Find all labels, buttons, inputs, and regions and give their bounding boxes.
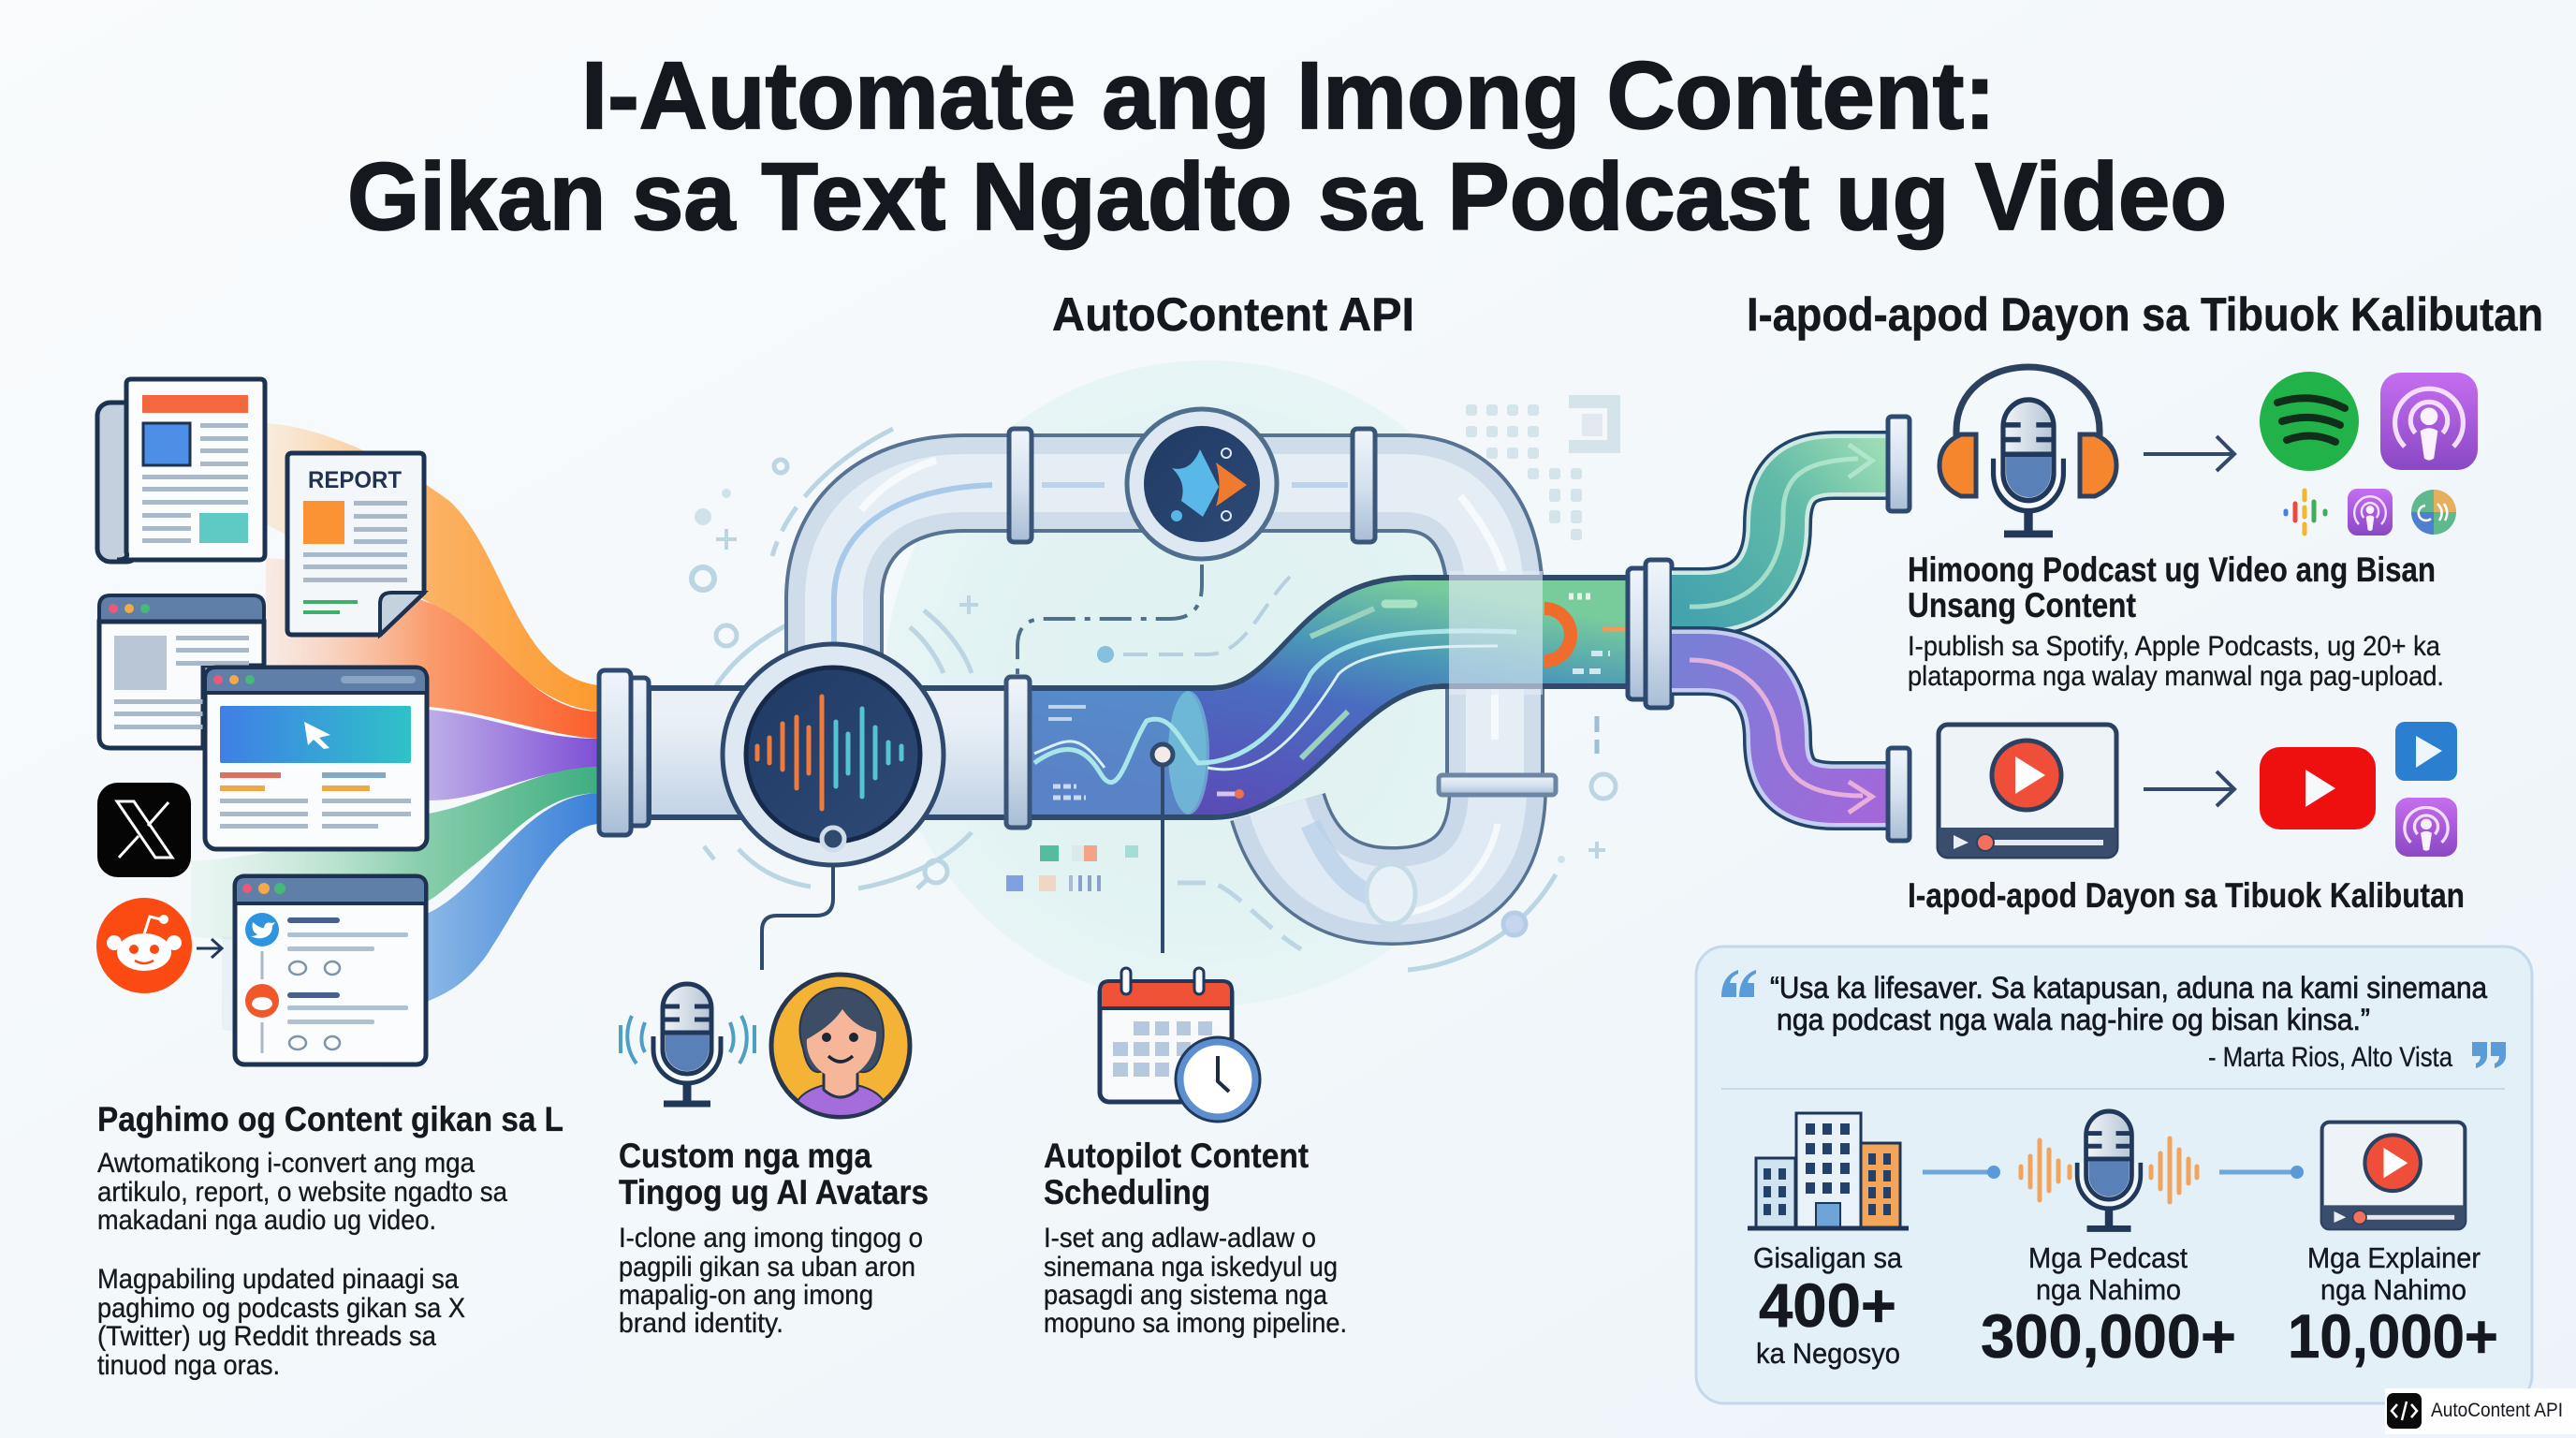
text block: autopilot: Scheduling <box>1044 1173 1210 1211</box>
stat: podcasts: nga Nahimo <box>2036 1273 2181 1306</box>
stat: businesses <box>1753 1241 1903 1370</box>
flange: podcast end <box>1888 417 1910 511</box>
quote text <box>1770 971 2487 1036</box>
icon: report <box>287 453 424 635</box>
colored source ribbons <box>191 423 598 1034</box>
text block: autopilot: pasagdi ang sistema nga <box>1044 1280 1327 1311</box>
text block: content from links: makadani nga audio ug video. <box>97 1205 436 1236</box>
panel: testimonial and stats <box>1696 946 2532 1403</box>
icon: avatar <box>771 975 910 1117</box>
output pipes <box>1672 417 1910 841</box>
text block: content from links: (Twitter) ug Reddit threads sa <box>97 1321 436 1352</box>
decorative sparks <box>692 429 1616 970</box>
text block: autopilot: mopuno sa imong pipeline. <box>1044 1308 1347 1339</box>
stat: explainers: nga Nahimo <box>2320 1273 2466 1306</box>
connector <box>2219 1166 2304 1179</box>
quote text: “Usa ka lifesaver. Sa katapusan, aduna na kami sinemana <box>1770 971 2487 1005</box>
icon: podcast headset mic <box>1939 367 2116 534</box>
pipe: translucent crossing <box>1449 571 1543 695</box>
connector <box>1923 1166 2000 1179</box>
stat: businesses: Gisaligan sa <box>1753 1241 1903 1274</box>
stat: explainers <box>2288 1241 2498 1371</box>
ribbon: blue <box>222 793 598 1034</box>
heading: AutoContent API: AutoContent API <box>1052 288 1414 341</box>
text block: content from links: artikulo, report, o website ngadto sa <box>97 1177 507 1208</box>
text block: create podcast and video: plataporma nga walay manwal nga pag-upload. <box>1908 661 2444 692</box>
icon: blue play <box>2395 722 2457 781</box>
right flange <box>1628 560 1672 708</box>
icon: X logo <box>97 783 191 877</box>
watermark badge <box>2385 1388 2576 1434</box>
icon: thread browser <box>235 876 426 1064</box>
icon: open quote <box>1721 970 1756 997</box>
ribbon: purple <box>429 710 598 800</box>
text block: custom voices: I-clone ang imong tingog o <box>619 1223 923 1254</box>
title: Gikan sa Text Ngadto sa Podcast ug Video <box>347 143 2227 250</box>
quote attribution: - Marta Rios, Alto Vista <box>2208 1042 2452 1073</box>
flow dot on pipe <box>1152 744 1173 765</box>
title <box>347 42 2227 250</box>
central halo <box>885 360 1530 1006</box>
stat: podcasts <box>1981 1241 2236 1371</box>
text block: create podcast and video <box>1908 550 2444 692</box>
icon: calendar with clock <box>1100 968 1260 1122</box>
text block: create podcast and video: Himoong Podcast ug Video ang Bisan <box>1908 550 2436 589</box>
icon: apple podcasts <box>2380 373 2478 470</box>
icon: google podcasts <box>2286 491 2325 534</box>
text block: custom voices: Custom nga mga <box>619 1137 871 1175</box>
arrow: video to platforms <box>2144 771 2234 806</box>
decorative data squares top right <box>1466 395 1620 540</box>
ribbon: orange <box>266 423 598 712</box>
title: I-Automate ang Imong Content: <box>581 42 1996 149</box>
text block: create podcast and video: I-publish sa Spotify, Apple Podcasts, ug 20+ ka <box>1908 631 2440 662</box>
watermark badge: AutoContent API <box>2431 1400 2563 1421</box>
heading: distribute caption: I-apod-apod Dayon sa Tibuok Kalibutan <box>1908 876 2465 915</box>
icon: browser front <box>205 668 427 849</box>
text block: content from links: paghimo og podcasts gikan sa X <box>97 1293 465 1324</box>
arrow: podcast to platforms <box>2144 436 2234 471</box>
left flange <box>599 670 649 835</box>
icon: close quote <box>2472 1042 2506 1068</box>
text block: autopilot: Autopilot Content <box>1044 1137 1309 1175</box>
arrow: reddit to thread <box>197 939 222 958</box>
text block: create podcast and video: Unsang Content <box>1908 586 2136 624</box>
icon: explainer video <box>2322 1123 2465 1228</box>
stat: explainers: 10,000+ <box>2288 1301 2498 1371</box>
icon: buildings <box>1748 1113 1909 1228</box>
pipe: lower U-turn <box>1278 786 1498 924</box>
stat: podcasts: Mga Pedcast <box>2028 1241 2188 1274</box>
callout leader lines <box>762 565 1290 970</box>
icon: podcast mic with waves <box>2021 1111 2197 1228</box>
text block: custom voices: pagpili gikan sa uban aron <box>619 1252 915 1283</box>
ribbon: red orange <box>266 558 598 739</box>
stat: explainers: Mga Explainer <box>2307 1241 2481 1274</box>
stat: podcasts: 300,000+ <box>1981 1301 2236 1371</box>
pipe: purple video <box>1672 660 1889 813</box>
data pipeline <box>599 409 1672 970</box>
stat: businesses: 400+ <box>1759 1270 1896 1340</box>
quote text: nga podcast nga wala nag-hire og bisan kinsa.” <box>1777 1003 2370 1036</box>
text block: content from links: Paghimo og Content gikan sa L <box>97 1100 564 1138</box>
top node: AI <box>1127 409 1277 559</box>
icon: newspaper <box>97 379 265 562</box>
pipe: main glass section <box>649 578 1628 817</box>
flow: glass lens and waves <box>1030 596 1627 814</box>
text block: autopilot: sinemana nga iskedyul ug <box>1044 1252 1338 1283</box>
flange: video end <box>1888 748 1910 841</box>
pipe: colored flow <box>1030 580 1626 814</box>
color swatches under pipe <box>1006 845 1138 891</box>
clamps <box>1006 429 1556 828</box>
stat: businesses: ka Negosyo <box>1756 1337 1900 1370</box>
icon: report: REPORT <box>308 467 402 493</box>
icon: small multicolor podcast <box>2411 490 2456 535</box>
text block: content from links: Awtomatikong i-convert ang mga <box>97 1148 475 1179</box>
icon: browser back <box>99 595 264 748</box>
icon: video player <box>1939 725 2116 857</box>
pipe: green podcast <box>1672 445 1889 607</box>
icon: spotify <box>2260 372 2359 471</box>
text block: custom voices: Tingog ug AI Avatars <box>619 1173 929 1211</box>
icon: voice mic with waves <box>621 984 754 1104</box>
ribbon: green <box>191 767 598 940</box>
main node: waveform <box>723 644 944 865</box>
text block: content from links <box>97 1100 564 1381</box>
text block: content from links: tinuod nga oras. <box>97 1350 280 1381</box>
icon: youtube <box>2260 747 2376 829</box>
icon: small podcasts <box>2348 489 2393 536</box>
text block: autopilot <box>1044 1137 1347 1339</box>
text block: custom voices: brand identity. <box>619 1308 783 1339</box>
icon: reddit <box>96 898 192 993</box>
pipe: upper loop <box>834 461 1503 786</box>
icon: purple podcast <box>2395 798 2457 857</box>
text block: custom voices: mapalig-on ang imong <box>619 1280 873 1311</box>
text block: content from links: Magpabiling updated pinaagi sa <box>97 1264 459 1295</box>
text block: autopilot: I-set ang adlaw-adlaw o <box>1044 1223 1316 1254</box>
text block: custom voices <box>619 1137 929 1339</box>
